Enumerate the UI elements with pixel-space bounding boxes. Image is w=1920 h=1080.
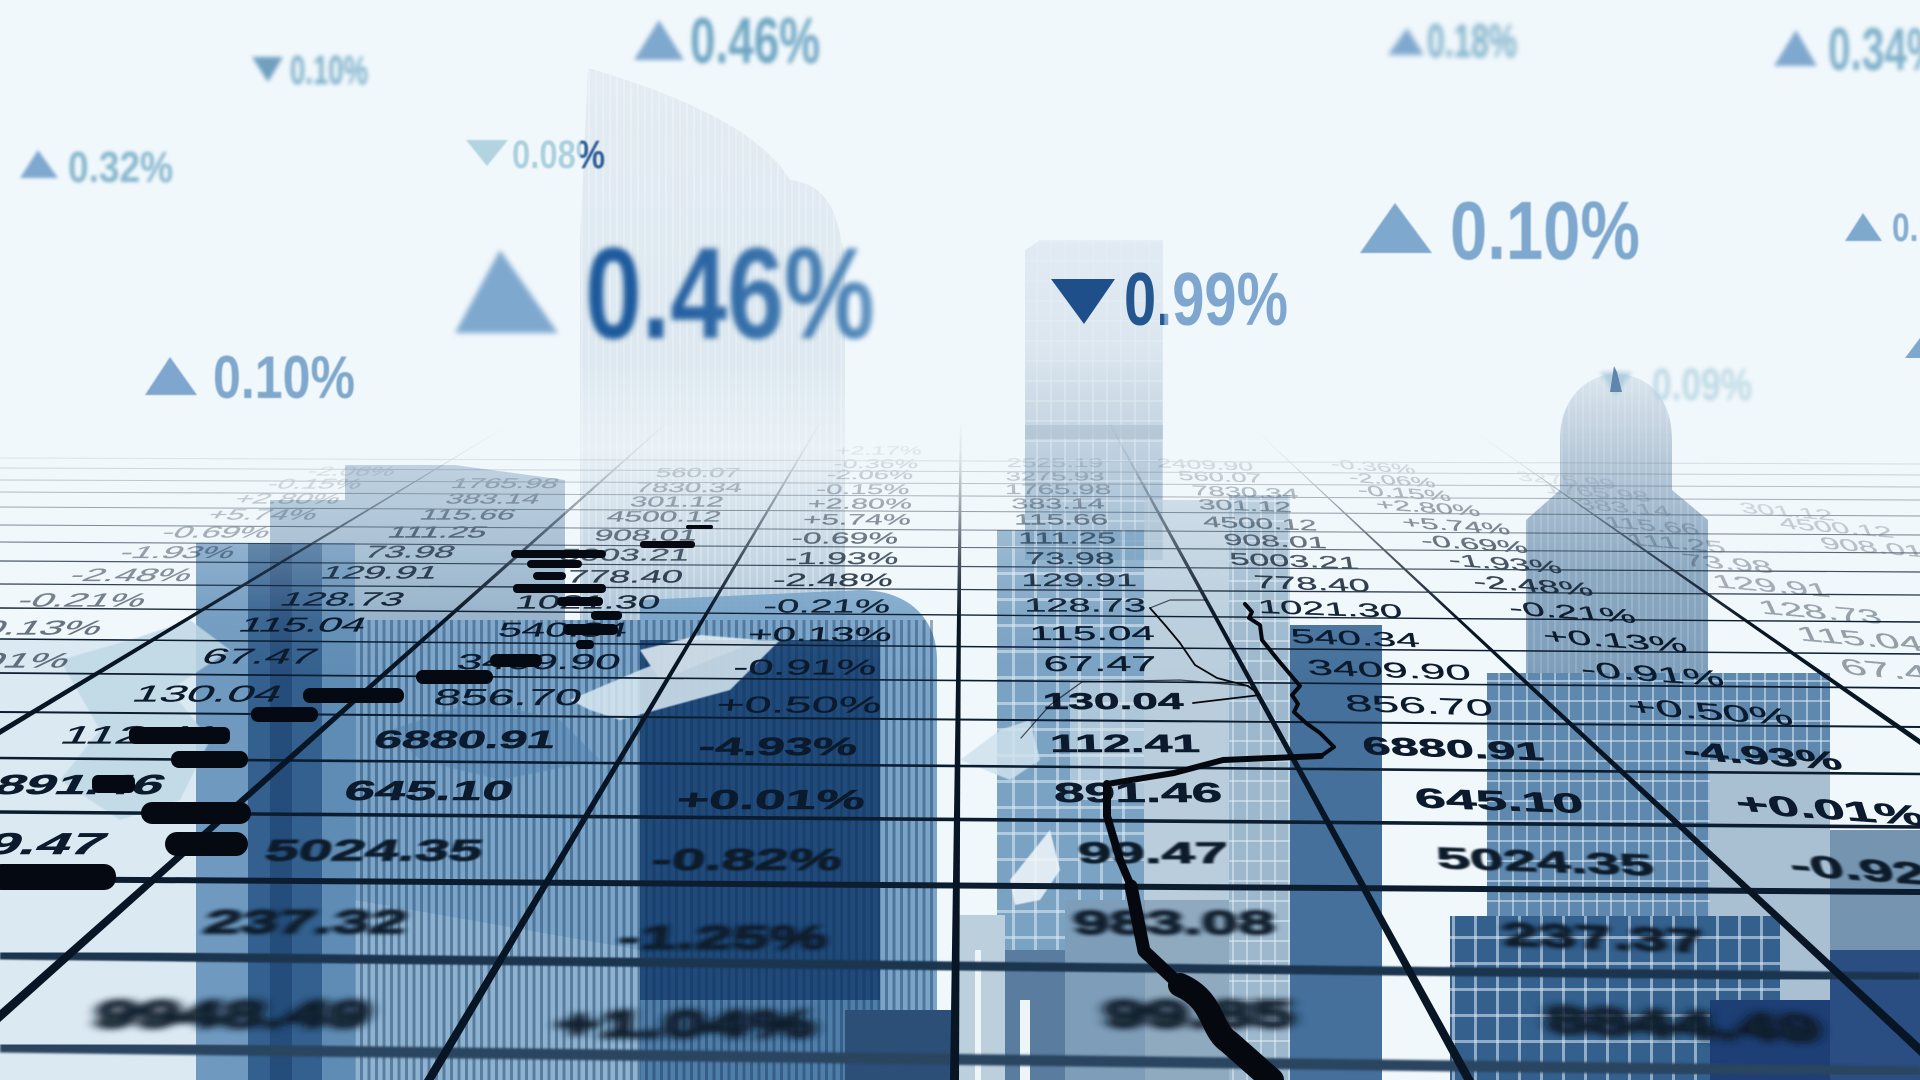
table column: far right faint values: 111.25 [1623, 529, 1729, 557]
table column: right values: 645.10 [1412, 783, 1586, 819]
table column: left values: 128.73 [276, 588, 410, 610]
table column: centre percentages: -0.82% [650, 843, 844, 877]
table column: centre left values: 3409.90 [454, 650, 624, 674]
table column: right values: 3409.90 [1305, 655, 1473, 685]
table column: centre left values: 4500.12 [605, 509, 723, 525]
table column: centre right values: 115.04 [1029, 622, 1155, 644]
table column: far right faint values: 4500.12 [1775, 514, 1897, 542]
table column: left values: 73.98 [360, 543, 460, 561]
table column: centre percentages: +0.13% [747, 623, 893, 645]
table column: centre percentages: +5.74% [802, 512, 912, 528]
table column: right values: 540.34 [1289, 624, 1421, 652]
table column: centre left values: 301.12 [628, 494, 726, 510]
world map overlay patches [60, 620, 1060, 905]
building: left block [196, 543, 355, 1080]
table column: left values: 67.47 [197, 644, 323, 668]
table column: centre percentages: +2.17% [835, 444, 923, 458]
dome spire [1610, 366, 1622, 392]
table column: centre percentages: -2.06% [826, 468, 914, 482]
table column: centre percentages: +0.50% [715, 692, 883, 718]
table column: right percentages: +2.80% [1373, 496, 1483, 520]
table column: right values: 856.70 [1343, 691, 1495, 721]
table column: centre right values: 112.41 [1049, 730, 1201, 758]
label: partial right edge [1845, 206, 1920, 250]
label: 0.99% [1051, 257, 1288, 341]
table column: far left percentages: -2.06% [304, 464, 401, 478]
label: 0.08%: 0.08% [512, 133, 605, 177]
table column: centre right values: 128.73 [1023, 594, 1147, 616]
table column: centre right values [1004, 456, 1295, 1035]
table column: right values: 5024.35 [1434, 841, 1656, 883]
table column: far left percentages: -0.21% [12, 589, 154, 611]
table column: centre right values: 1765.98 [1004, 481, 1112, 497]
table column: right values: 5003.21 [1228, 549, 1360, 573]
table column: left values: 130.04 [127, 681, 289, 707]
table column: centre right values: 129.91 [1021, 570, 1137, 590]
table column: centre percentages: -0.69% [790, 529, 900, 547]
icon: edge triangle [1905, 338, 1920, 358]
table column: centre right values: 983.08 [1072, 905, 1276, 941]
table column: centre left values: 908.01 [592, 526, 700, 544]
table grid: row lines [0, 458, 1920, 1072]
chart line: right wiggly black line [1021, 600, 1334, 1080]
table column: centre left values: 5003.21 [558, 546, 692, 564]
table column: left values: 115.04 [234, 614, 372, 636]
table column: centre percentages: +2.80% [807, 496, 913, 512]
label: 0.99%: 0.99% [1124, 257, 1288, 341]
table column: right values: 560.07 [1177, 468, 1263, 486]
table column: centre right values: 99.47 [1077, 836, 1229, 870]
building: R2 [1144, 495, 1382, 1080]
table column: far right faint values: 73.98 [1679, 550, 1777, 578]
table column: left values: 129.91 [317, 563, 443, 583]
table column: centre left values: 9948.49 [90, 993, 376, 1035]
label: 0.32% [20, 143, 173, 192]
label: 0.09%: 0.09% [1652, 359, 1752, 410]
table column: far left percentages: -0.15% [263, 476, 367, 492]
table column: right values: 237.37 [1499, 916, 1707, 960]
table column: centre percentages: -1.25% [616, 920, 830, 956]
label: 0.08% [466, 133, 605, 177]
tall pale curved tower [580, 68, 845, 1080]
tower with rooftop, centre [1025, 240, 1163, 560]
table column: right percentages: -2.06% [1346, 469, 1438, 491]
label: 0.10% right large [1360, 184, 1640, 277]
label: 0.34% top right [1774, 16, 1920, 83]
table column: centre left values: 778.40 [565, 567, 685, 587]
building: R4 dark [1450, 916, 1830, 1080]
label: 0.10% lower left: 0.10% [213, 344, 355, 411]
table column: centre percentages: -0.15% [815, 481, 911, 497]
label: 0.10% top left [252, 47, 368, 93]
table column: centre percentages: +0.01% [675, 785, 867, 815]
table column: centre right values: 73.98 [1025, 549, 1115, 567]
table column: far right faint values: 115.66 [1601, 513, 1703, 539]
table column: centre percentages: -2.48% [772, 570, 894, 590]
table column: centre left values: 5024.35 [261, 834, 487, 868]
table column: centre left values: 540.34 [496, 619, 630, 641]
table column: right percentages: +5.74% [1400, 514, 1512, 538]
table column: centre right values: 3275.93 [1005, 469, 1105, 483]
table column: centre percentages: -0.36% [833, 457, 919, 471]
table column: far right faint values: 3275.99 [1513, 468, 1619, 492]
table column: centre left values [90, 466, 744, 1035]
data table overlay [0, 434, 1920, 1080]
table column: right percentages: -0.15% [1355, 482, 1453, 504]
table column: far right faint values [1513, 468, 1920, 689]
table grid: perspective column lines [0, 434, 1920, 1080]
left foreground wash [0, 640, 200, 1080]
table column: centre percentages: +1.04% [553, 1003, 819, 1045]
table column: far right faint values: 1765.98 [1540, 480, 1654, 506]
table column: centre right values: 891.46 [1053, 778, 1223, 808]
table column: far right faint values: 383.14 [1574, 496, 1674, 520]
table column: centre left values: 6880.91 [371, 726, 559, 754]
table column: centre percentages [553, 444, 923, 1045]
table column: right percentages [1329, 457, 1920, 896]
table column: centre left values: 7830.34 [634, 479, 744, 495]
label: 0.46% large: 0.46% [585, 220, 875, 366]
label: 0.18% top: 0.18% [1427, 14, 1517, 67]
table column: left values: 111.25 [384, 523, 492, 541]
table column: right values: 8844.49 [1542, 998, 1824, 1050]
table column: right values: 6880.91 [1360, 732, 1546, 766]
building: center R1 [997, 530, 1144, 950]
table column: right percentages: -0.69% [1418, 531, 1530, 557]
table column: right percentages: -2.48% [1470, 572, 1596, 600]
label: 0.46% top [634, 4, 820, 77]
table column: centre right values: 115.66 [1014, 512, 1108, 528]
label: 0.18% top [1388, 14, 1517, 67]
label: 0.46% large [455, 220, 875, 366]
table column: far left percentages: +2.80% [230, 491, 346, 507]
table column: right percentages: -0.21% [1505, 597, 1639, 627]
table column: right values [1156, 456, 1824, 1050]
chart line: left black dashes [0, 525, 713, 890]
label: 0.32%: 0.32% [68, 143, 173, 192]
table column: right values: 7830.34 [1191, 482, 1300, 502]
label: 0.46% top: 0.46% [690, 4, 820, 77]
table column: far left percentages: -1.93% [115, 544, 241, 562]
table column: right values: 2409.90 [1156, 456, 1254, 474]
domed tower [1526, 374, 1708, 790]
table column: right values: 1021.30 [1256, 596, 1404, 622]
table column: far right faint values: 128.73 [1754, 596, 1886, 628]
building: center wide curved block [355, 590, 937, 1080]
table column: centre percentages: -4.93% [697, 733, 859, 761]
table column: far right faint values: 301.12 [1737, 500, 1837, 524]
building: upper left pale block [270, 465, 565, 620]
table column: centre right values: 111.25 [1018, 529, 1116, 547]
table column: centre right values: 2525.19 [1006, 456, 1104, 470]
table column: left values: 115.66 [417, 507, 519, 523]
table column: left values: 112.41 [55, 721, 227, 749]
table column: right percentages: -1.93% [1445, 550, 1565, 578]
table column: right values: 4500.12 [1202, 514, 1318, 534]
table column: right percentages: -0.36% [1329, 457, 1418, 477]
table column: centre percentages: -1.93% [784, 549, 900, 567]
table column: far left percentages: -2.48% [65, 565, 199, 585]
table column: centre left values: 237.32 [200, 903, 412, 941]
table column: centre right values: 383.14 [1011, 496, 1105, 512]
table column: centre percentages: -0.21% [762, 595, 892, 617]
building: R3 glass [1487, 673, 1830, 1080]
table column: far right faint values: 129.91 [1709, 570, 1833, 602]
table column: centre left values: 1021.30 [513, 591, 663, 613]
label: 0.09% [1600, 359, 1752, 410]
table column: left values: 383.14 [442, 491, 544, 507]
table column: right percentages: +0.50% [1623, 693, 1797, 731]
table column: right values: 908.01 [1222, 530, 1328, 552]
label: 0.10% lower left [145, 344, 355, 411]
table column: far left percentages: +5.74% [203, 507, 323, 523]
building: right corner [1830, 830, 1920, 1080]
city skyline buildings [196, 465, 1920, 1080]
label: 0.10% right large: 0.10% [1450, 184, 1640, 277]
table column: centre right values: 67.47 [1043, 652, 1157, 676]
table column: centre right values: 99.85 [1103, 993, 1295, 1035]
table column: right values: 301.12 [1197, 496, 1293, 516]
table column: centre left values: 856.70 [431, 685, 585, 711]
table column: left values: 1765.98 [448, 476, 562, 492]
table column: right values: 778.40 [1252, 572, 1372, 596]
table column: left values [0, 476, 562, 861]
table column: right percentages: +0.13% [1540, 625, 1690, 657]
table column: right percentages: -0.91% [1577, 657, 1727, 691]
table column: centre left values: 645.10 [341, 776, 517, 806]
table column: far left percentages: -0.69% [157, 523, 277, 541]
table column: right percentages: -4.93% [1678, 736, 1846, 776]
table column: centre left values: 560.07 [654, 466, 742, 480]
building: low foreground centre [845, 900, 1145, 1080]
table column: far left percentages [0, 464, 401, 672]
label: 0.10% top left: 0.10% [290, 47, 368, 93]
table column: centre right values: 130.04 [1042, 688, 1185, 714]
table column: centre percentages: -0.91% [732, 655, 878, 679]
